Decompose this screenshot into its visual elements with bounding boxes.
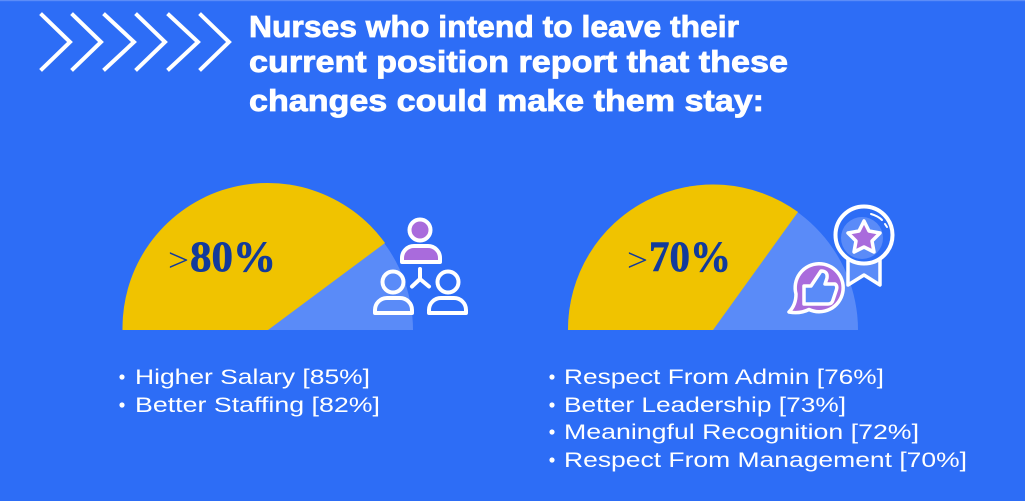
list: right reasons: Meaningful Recognition [72%] <box>564 421 919 444</box>
list: left reasons: Higher Salary [85%] <box>135 366 370 389</box>
gauge value: 80% <box>190 234 276 281</box>
list: right reasons: Respect From Management [70%] <box>564 449 967 472</box>
icon: chevrons <box>42 15 229 69</box>
title: Nurses who intend to leave their <box>249 9 739 44</box>
list: left reasons <box>119 366 380 417</box>
title: current position report that these <box>249 44 788 79</box>
list: right reasons: Respect From Admin [76%] <box>564 366 884 389</box>
gauge value: 70% <box>649 234 731 281</box>
title <box>249 9 788 118</box>
list: left reasons: Better Staffing [82%] <box>135 394 380 417</box>
icon: team of people <box>375 220 466 313</box>
icon: award ribbon and thumbs-up <box>789 206 892 313</box>
panel: left gauge <box>122 183 413 330</box>
title: changes could make them stay: <box>249 83 764 118</box>
list: right reasons <box>549 366 967 472</box>
gauge value: > <box>627 243 648 279</box>
list: right reasons: Better Leadership [73%] <box>564 394 846 417</box>
gauge value: > <box>168 243 189 279</box>
panel: right gauge <box>568 184 858 330</box>
